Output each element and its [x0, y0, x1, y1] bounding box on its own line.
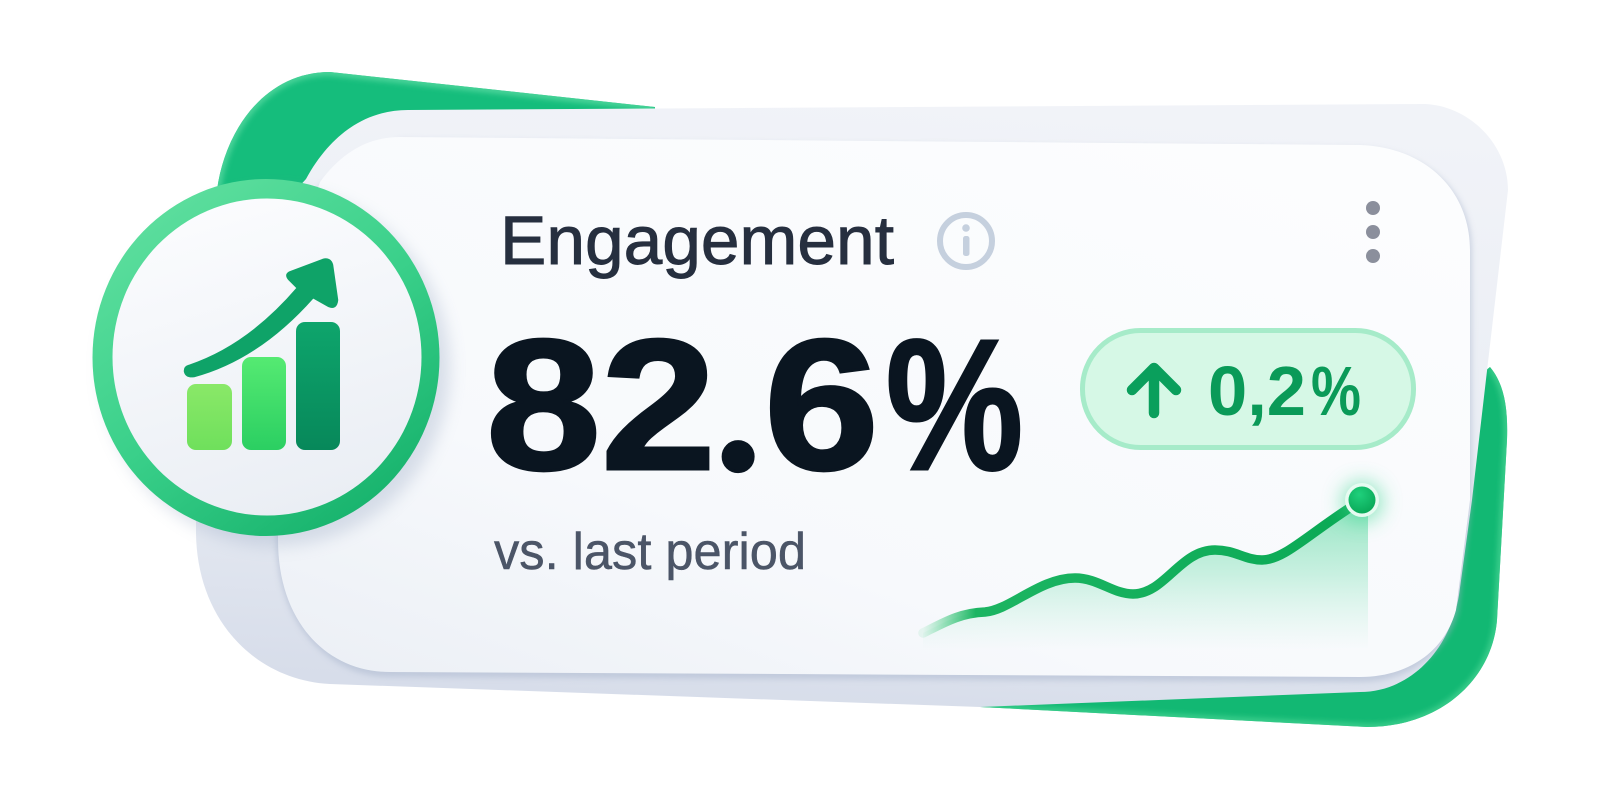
main value: 82.6%: 82 [486, 302, 716, 509]
bar 3 [296, 322, 340, 450]
bar 1 [187, 384, 232, 450]
heading: Engagement: Engagement [500, 202, 894, 279]
icon: up arrow [1132, 368, 1176, 413]
icon: info [940, 215, 992, 267]
icon: rising bars and arrow [185, 260, 340, 450]
circle badge shadow [102, 190, 450, 546]
end point marker [1345, 483, 1379, 517]
back card [196, 104, 1508, 707]
change value: % [1311, 352, 1361, 430]
end point glow [1342, 482, 1382, 522]
change badge [1082, 330, 1414, 448]
change value: 0,2 [1208, 352, 1306, 430]
sparkline chart [923, 482, 1382, 650]
rising arrow [185, 260, 337, 376]
green back panel: bottom right [980, 367, 1507, 727]
main value: 82.6% [486, 302, 1023, 510]
change value [1208, 352, 1361, 430]
infographic: engagement KPI card [92, 72, 1508, 727]
circle badge [92, 179, 440, 536]
front card shadow [276, 140, 1472, 682]
main value: 82.6%: . [715, 305, 761, 510]
menu dots [1366, 201, 1380, 263]
main value: 82.6%: % [886, 302, 1023, 509]
front card [278, 137, 1470, 677]
bar 2 [242, 357, 286, 450]
caption: vs. last period: vs. last period [494, 523, 806, 581]
main value: 82.6%: 6 [764, 302, 879, 509]
green back panel: top left [218, 72, 655, 186]
